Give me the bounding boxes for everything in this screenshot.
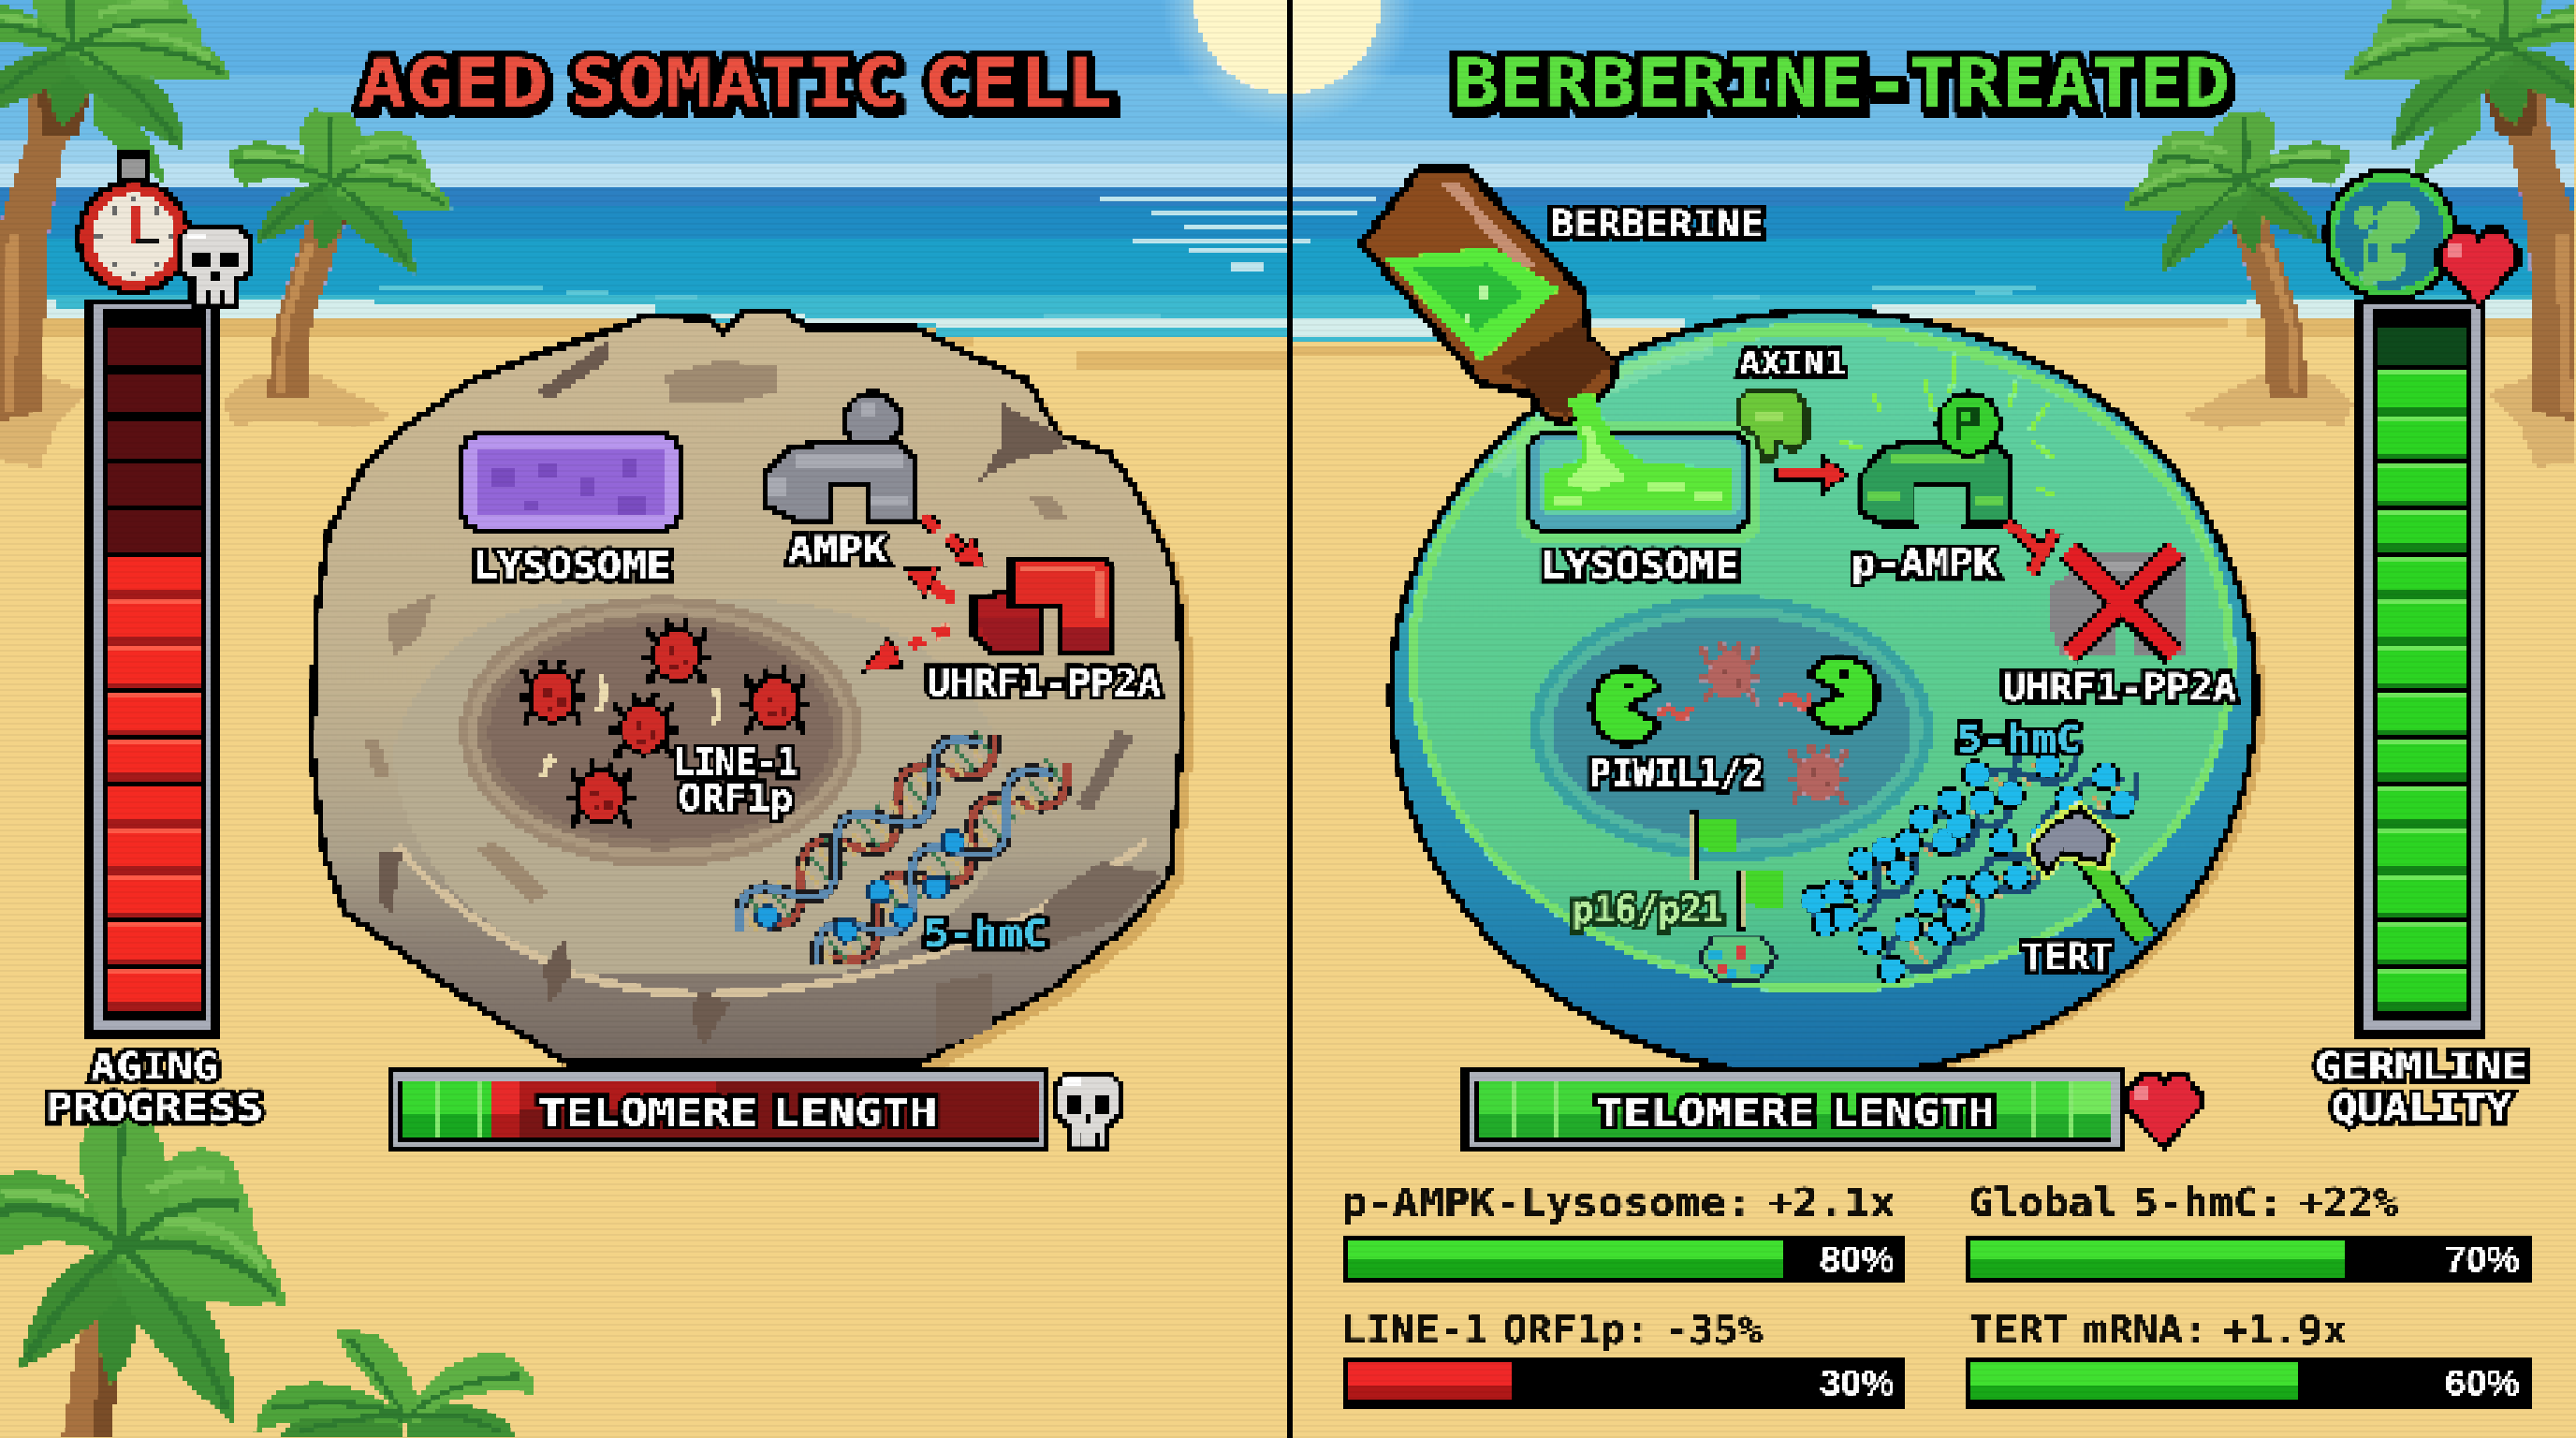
label: 5-hmC right: 5-hmC (1957, 718, 2081, 761)
value: 80%: 80% (1820, 1240, 1895, 1280)
palm: lower left small (255, 1328, 534, 1438)
centre divider (1287, 0, 1293, 1438)
sun (1162, 0, 1414, 126)
label: germline quality (2315, 1046, 2528, 1130)
label: LINE-1 ORF1p: ORF1p (679, 777, 793, 820)
bar: telomere length aged (388, 1068, 1050, 1152)
icon: heart on germline gauge (2438, 229, 2518, 306)
palm: lower left large (0, 1108, 286, 1438)
value: 30%: 30% (1820, 1364, 1895, 1403)
icon: AXIN1 green blob (1737, 391, 1807, 459)
arrow: UHRF1-PP2A to AMPK (904, 567, 955, 599)
panel: berberine-treated cell (1362, 168, 2265, 1080)
palm: upper right small (2124, 110, 2349, 399)
palm: upper left large (0, 0, 232, 421)
sand (0, 316, 2576, 1438)
stat bar: TERT mRNA 60% (1966, 1357, 2530, 1407)
stat label: LINE-1 ORF1p: LINE-1 ORF1p: -35% (1341, 1307, 1763, 1353)
label: telomere length left: TELOMERE LENGTH (538, 1092, 937, 1135)
icon: p-AMPK green protein (1839, 354, 2056, 526)
label: p16/p21: p16/p21 (1572, 888, 1723, 932)
label: TERT: TERT (2021, 936, 2113, 979)
arrow: UHRF1-PP2A to nucleus (dashed) (862, 628, 949, 671)
cell: healthy green body (1391, 312, 2265, 1080)
label: lysosome left: LYSOSOME (473, 545, 671, 588)
label: AMPK: AMPK (788, 529, 887, 572)
palm shadows (0, 374, 2576, 468)
title: aged somatic cell: AGED SOMATIC CELL (359, 45, 1113, 122)
cell: cracked rock body (312, 312, 1194, 1074)
icon: inactivated UHRF1-PP2A with red X (2048, 550, 2188, 655)
sea (0, 187, 2576, 345)
panel: aged somatic cell (312, 312, 1194, 1074)
arrow: lysosome to p-AMPK (1777, 457, 1847, 492)
nucleus with LINE-1 bugs (460, 596, 862, 868)
label: LINE-1 ORF1p: LINE-1 (674, 741, 798, 785)
stat label: TERT mRNA: TERT mRNA: +1.9x (1969, 1307, 2348, 1353)
icon: lysosome (purple) (459, 431, 683, 534)
label: aging progress: AGING (91, 1046, 218, 1089)
stat bar: Global 5-hmC 70% (1966, 1235, 2530, 1283)
icon: TERT hammer (2024, 800, 2145, 938)
palm: upper right large (2344, 0, 2576, 421)
gauge: germline quality (2356, 301, 2487, 1037)
label: telomere length right: TELOMERE LENGTH (1596, 1092, 1995, 1135)
label: 5-hmC left: 5-hmC (924, 913, 1047, 956)
icon: skull on aging gauge (179, 227, 251, 305)
icon: heart by telomere bar (2126, 1074, 2200, 1148)
gauge: aging progress (86, 298, 218, 1037)
stat bar: LINE-1 ORF1p 30% (1341, 1357, 1904, 1407)
arrow: AMPK to UHRF1-PP2A (dashed) (922, 517, 985, 567)
label: LINE-1 ORF1p (674, 741, 798, 820)
nucleus with PIWIL chomping LINE-1 (1530, 595, 1933, 861)
label: berberine: BERBERINE (1550, 203, 1764, 246)
value: 70%: 70% (2445, 1240, 2520, 1280)
stat bar: p-AMPK-Lysosome 80% (1341, 1235, 1904, 1283)
arrow: p-AMPK inhibits UHRF1-PP2A (2007, 522, 2056, 573)
icon: skull by telomere bar (1056, 1074, 1120, 1148)
icon: embryo orb (2323, 168, 2458, 302)
icon: stopwatch (76, 152, 192, 295)
label: p-AMPK: p-AMPK (1852, 542, 1998, 585)
label: AXIN1: AXIN1 (1739, 345, 1846, 383)
label: germline quality: QUALITY (2332, 1087, 2511, 1130)
palm: upper left small (227, 110, 452, 399)
title: berberine-treated: BERBERINE-TREATED (1453, 45, 2230, 122)
label: aging progress: PROGRESS (46, 1087, 263, 1130)
bar: telomere length treated (1462, 1068, 2124, 1152)
label: UHRF1-PP2A right: UHRF1-PP2A (2002, 667, 2236, 710)
icon: p16/p21 flags and senescent cell (1690, 813, 1785, 979)
label: germline quality: GERMLINE (2315, 1046, 2528, 1089)
icon: UHRF1-PP2A red block (973, 559, 1113, 653)
icon: DNA helices covered in 5-hmC beads (1801, 722, 2151, 993)
sky (0, 0, 2576, 187)
icon: AMPK grey protein (766, 393, 915, 522)
icon: DNA helices with 5-hmC marks (725, 715, 1081, 984)
stat label: Global 5-hmC: Global 5-hmC: +22% (1969, 1180, 2398, 1225)
value: 60%: 60% (2445, 1364, 2520, 1403)
label: lysosome right: LYSOSOME (1541, 545, 1739, 588)
icon: lysosome with green slime (1516, 393, 1762, 543)
label: aging progress (46, 1046, 263, 1130)
stat label: p-AMPK-Lysosome: p-AMPK-Lysosome: +2.1x (1341, 1180, 1895, 1225)
label: UHRF1-PP2A left: UHRF1-PP2A (927, 662, 1161, 705)
label: PIWIL1/2: PIWIL1/2 (1589, 753, 1764, 796)
icon: berberine bottle pouring (1362, 168, 1617, 426)
